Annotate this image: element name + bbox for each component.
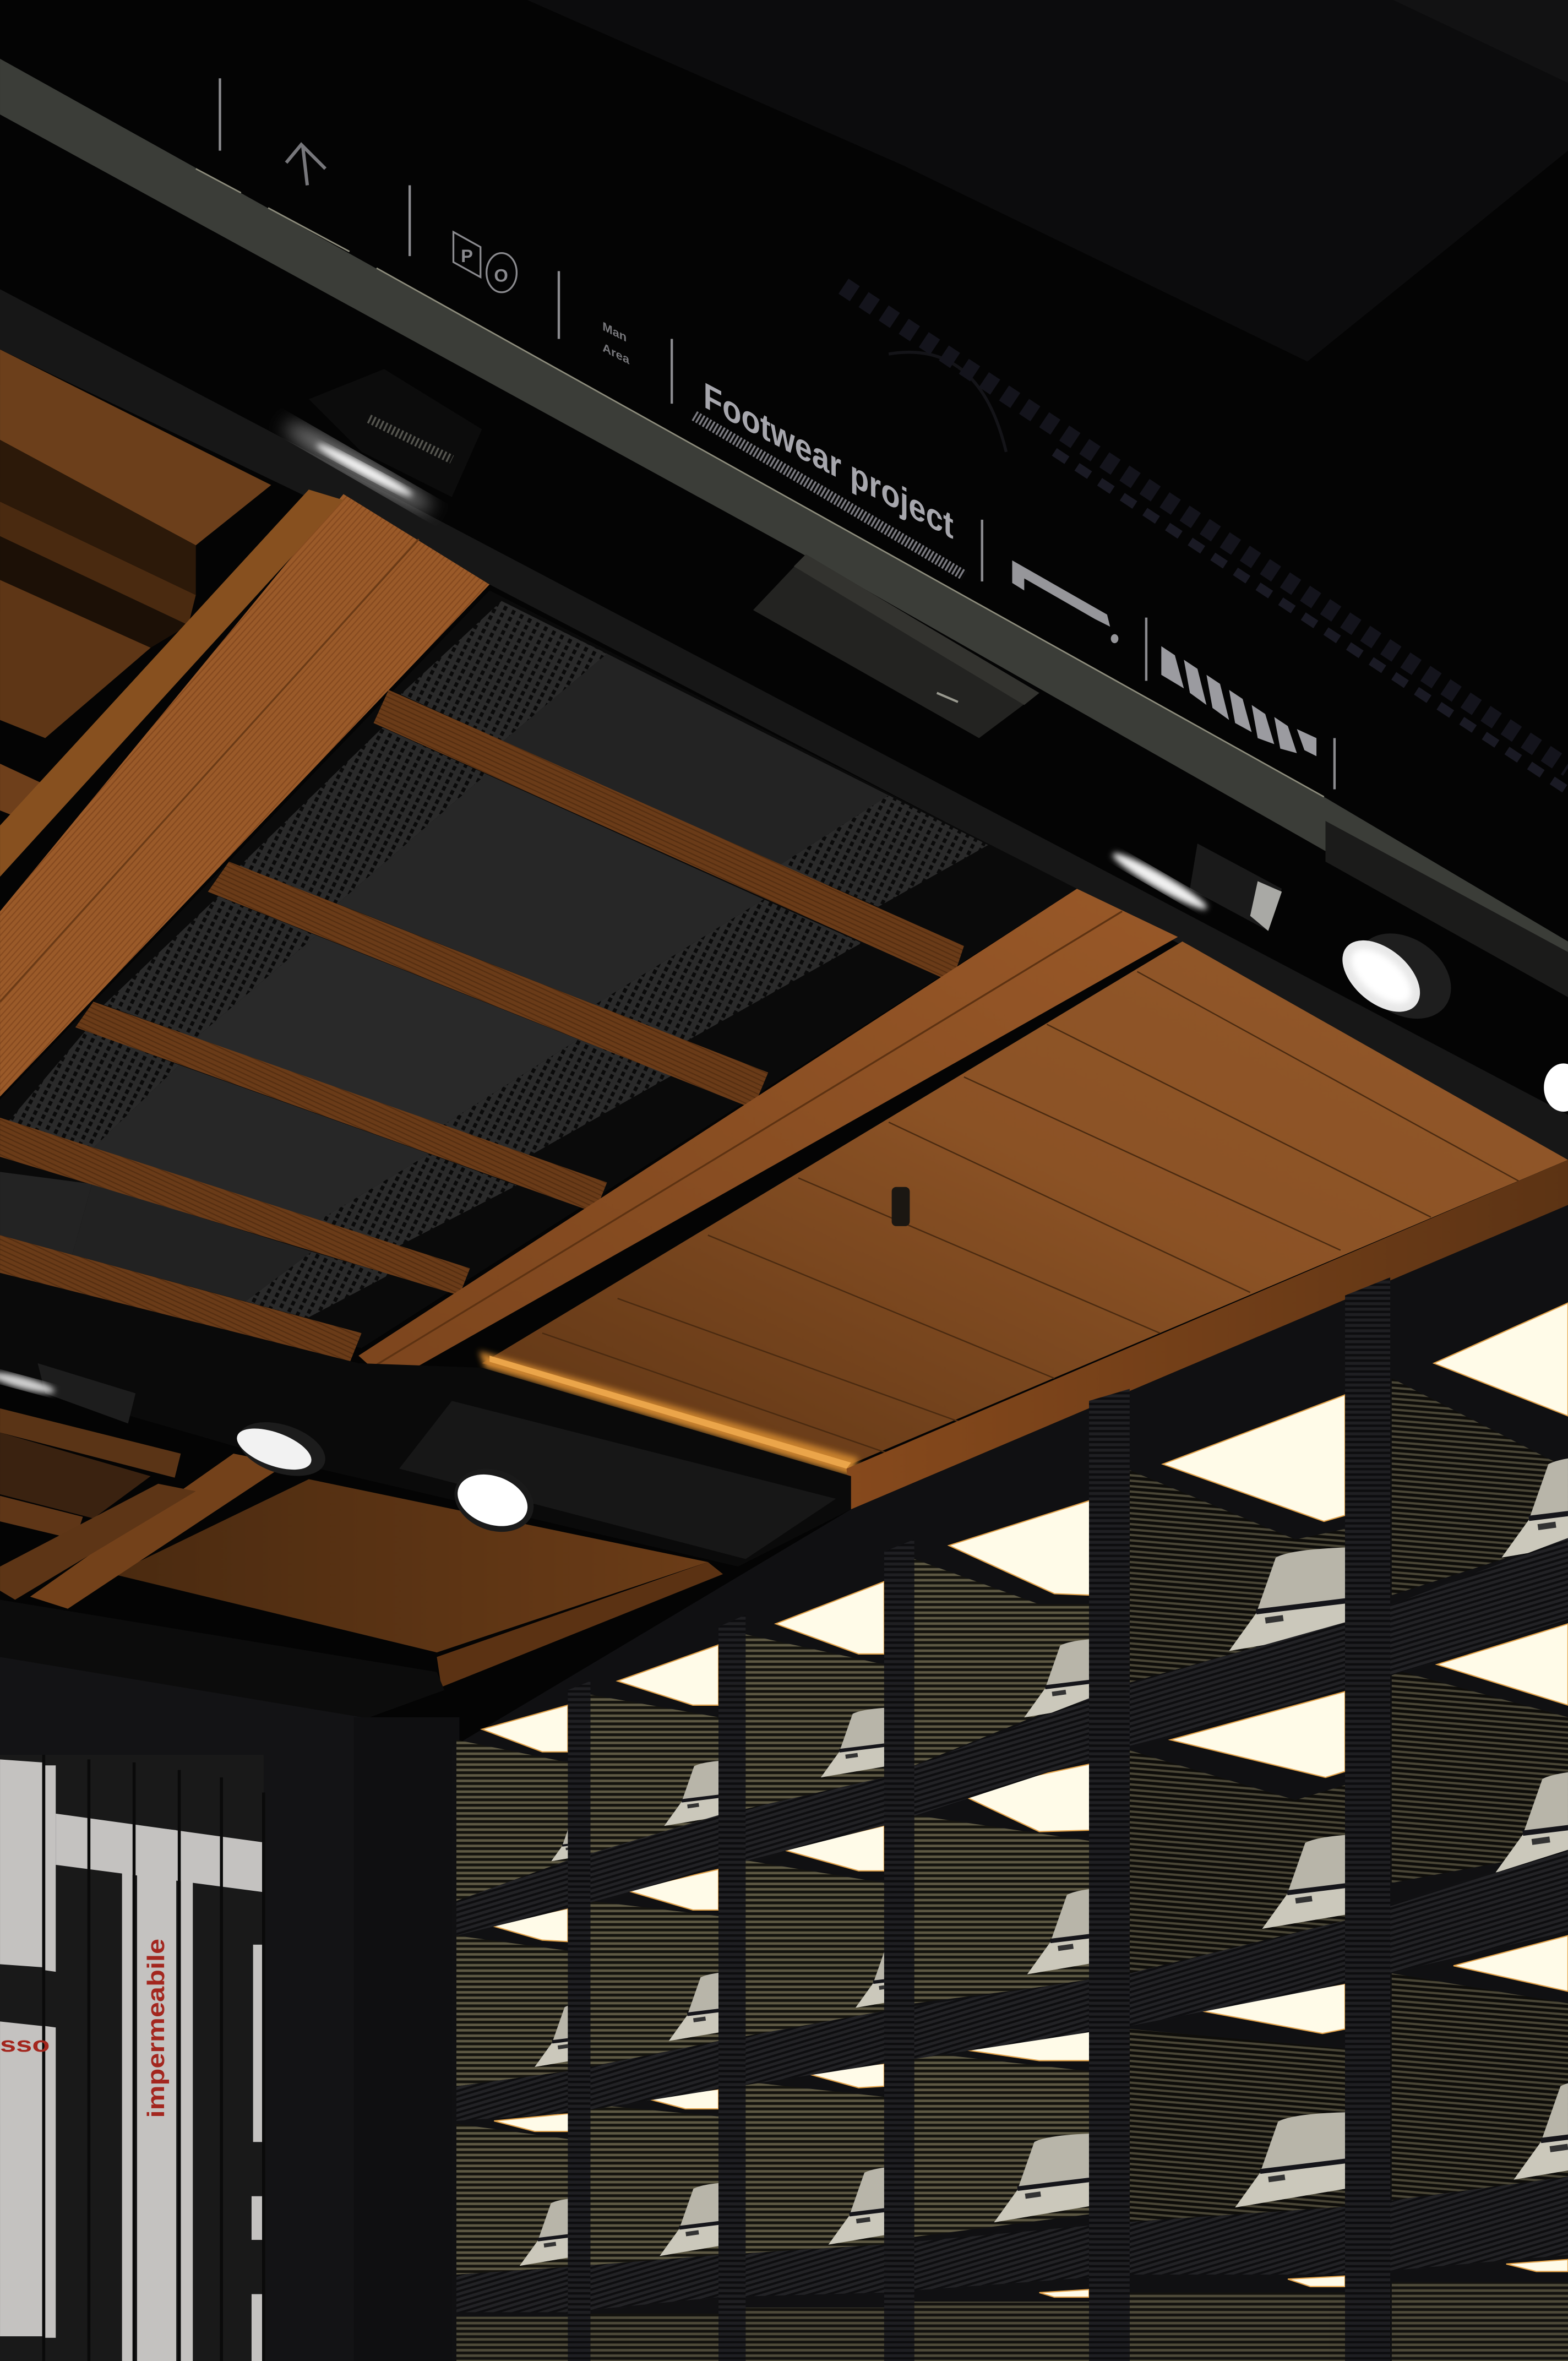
back panels, left columns (456, 1559, 1089, 2275)
hats: column 3 (994, 1639, 1089, 2222)
sign: Man Area label: Area (602, 340, 630, 367)
black lighting track, upper (0, 289, 1568, 1160)
grey signage beam (0, 59, 1568, 997)
spotlight: lower right (445, 1458, 542, 1542)
sign: Man Area label: Man (602, 319, 627, 345)
wood plank panel, right (482, 942, 1568, 1464)
spotlight: far right edge (1544, 1063, 1568, 1112)
shelf lights (482, 1303, 1568, 2297)
sign: P O pictogram (454, 232, 516, 292)
grille: cell 2 (239, 727, 862, 1041)
back panels, bottom row (456, 2282, 1568, 2361)
wood main beam, right diagonal (358, 889, 1178, 1383)
sign: zigzag stripes logo (1161, 646, 1316, 756)
wood trim above shelving (847, 1160, 1568, 1509)
upper black ceiling (527, 0, 1568, 791)
light streak: upper left (280, 416, 437, 518)
hats: column 6 (520, 1830, 568, 2266)
wood cross bars (0, 690, 964, 1363)
glowing cove light strip (479, 1351, 858, 1476)
sign: P O pictogram: P (461, 246, 473, 266)
shelving: back panels (456, 1378, 1568, 2361)
panel: light blocks (0, 1759, 262, 2361)
sign: hatch bar (694, 416, 964, 575)
grille: cell 4 (9, 1030, 516, 1245)
corner wall column (354, 1717, 459, 2361)
panel text: sso: sso (0, 2033, 50, 2057)
wall graphic panel (0, 1755, 264, 2361)
grille: cell 3 (104, 896, 672, 1155)
hats: column 4 (821, 1708, 884, 2245)
sign: P O pictogram: O (494, 265, 508, 286)
sign: Man Area label (602, 319, 630, 367)
fixture: upper left housing (309, 369, 482, 497)
spotlight: lower middle (231, 1412, 332, 1486)
hats: column 1 (1496, 1454, 1568, 2180)
sign: logo mark (1012, 561, 1118, 643)
fixture: track head right (1109, 844, 1282, 931)
shelving frame (452, 1205, 1568, 2361)
speaker box (753, 554, 1039, 738)
back panels, right columns (1130, 1378, 1568, 2222)
spotlight: right (1329, 916, 1467, 1036)
dark band under ceiling (0, 1600, 444, 1720)
panel: separators (43, 1755, 264, 2361)
lower wood panel (113, 1479, 723, 1687)
lower-left wood frame (0, 1408, 286, 1609)
hats: column 2 (1229, 1547, 1345, 2208)
hats: column 5 (660, 1761, 718, 2256)
fixture: lower left (0, 1363, 135, 1423)
panel text: impermeabile: impermeabile (143, 1939, 170, 2118)
wood frame, top left (0, 350, 271, 825)
sign: divider ticks (220, 78, 1335, 790)
spotlights and light streaks (0, 369, 1568, 1542)
dark ceiling grille (0, 590, 1077, 1348)
sign: up arrow (286, 145, 325, 185)
sign: Footwear project: Footwear project (704, 374, 954, 547)
wood main beam, left diagonal (0, 489, 489, 1097)
grille: cell 5 (0, 1172, 390, 1318)
hats on shelves (520, 1454, 1568, 2266)
left wall (0, 1657, 362, 2361)
lower black beam (0, 1273, 851, 1566)
shelf columns (568, 1277, 1390, 2361)
shelf boards (456, 1538, 1568, 2312)
grille: cell 1 (401, 601, 988, 907)
